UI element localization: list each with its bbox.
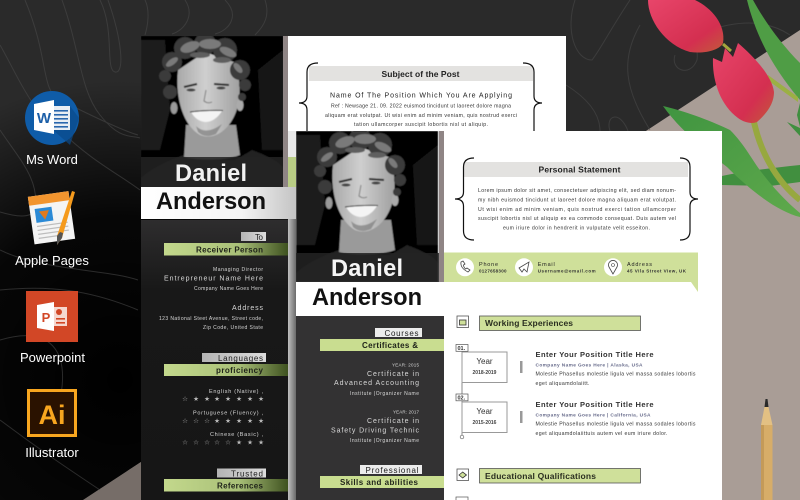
certificate 1: Institute |Organizer Name [350,391,419,397]
receiver details: Address [232,305,264,312]
contact: phone [456,258,507,276]
receiver details: Zip Code, United State [203,325,263,331]
subject body text [325,92,517,128]
icon: Microsoft Word [25,91,79,145]
receiver details: 123 National Steet Avenue, Street code, [159,316,263,322]
name: Anderson: Anderson [156,189,266,215]
contact: address: Address [627,262,652,268]
language ratings: ☆ [204,438,210,446]
white name band [141,187,296,219]
receiver details: Managing Director [213,267,263,273]
certificate 2: Safety Driving Technic [331,428,420,434]
entry 2 details: Enter Your Position Title Here [536,400,654,409]
receiver details: Entrepreneur Name Here [164,276,263,282]
tulips and leaves [648,0,800,217]
entry 2 details [520,400,696,437]
personal statement box: eum iriure dolor in hendrerit in vulputate velit esseiton. [503,226,650,232]
language ratings: ★ [236,395,242,403]
bar: References [164,479,288,492]
language ratings: ☆ [182,395,188,403]
tag: Languages: Languages [218,354,263,363]
entry 1 details: Molestie Phasellus molestie ligula vel massa sodales lobortis [536,372,696,378]
entry 1 details: eget aliquamdolaiitt. [536,381,590,387]
language ratings [182,389,264,446]
tag: To: To [255,233,264,242]
dark sidebar panel [141,220,288,500]
language ratings: ☆ [204,417,210,425]
language ratings: ☆ [225,438,231,446]
language ratings: ★ [258,417,264,425]
personal statement box: my nibh euismod tincidunt ut laoreet dolore magna aliquam erat volutpat. [478,198,676,204]
tag: Languages [202,353,266,363]
name: Anderson: Anderson [312,285,422,311]
language ratings: ★ [214,417,220,425]
bar: Skills and abilities: Skills and abilities [340,478,419,487]
certificate 1: Advanced Accounting [334,380,419,387]
entry 2 date: 02. [458,396,466,402]
language ratings: ☆ [182,438,188,446]
certificate 1 [334,362,419,397]
language ratings: ★ [236,438,242,446]
personal statement box: Lorem ipsum dolor sit amet, consectetuer adipiscing elit, sed diam nonum- [478,188,676,194]
contact: email [515,258,596,276]
tag: Courses: Courses [384,329,418,338]
subject brackets [299,62,542,131]
hair lumps are part of the portrait [159,33,251,101]
section: Educational Qualifications: Educational Qualifications [485,471,596,481]
contact: address [604,258,687,276]
contact: address: 45 Vila Street View, UK [627,268,687,274]
entry 1 date: 2018-2019 [473,370,497,376]
icon: PowerPoint: P [42,310,51,325]
subject header bar [309,66,533,81]
entry 2 details: eget aliquamdolaiittuis autem vel eum iriure dolor. [536,431,668,437]
certificate 1: YEAR: 2015 [392,362,419,368]
language ratings: ★ [225,395,231,403]
entry 1 date: Year [476,357,493,366]
contact: email: Email [538,262,555,268]
subject body text: Ref : Newsage 21. 09. 2022 euismod tincidunt ut laoreet dolore magna [331,104,511,110]
certificate 2 [331,410,420,444]
tag: Professional: Professional [366,466,419,475]
bar: Certificates [320,339,444,351]
left resume sheet [141,33,296,500]
tag: Trusted [217,468,266,478]
tag: To [241,232,266,242]
dark sidebar panel [296,316,444,500]
icon: Adobe Illustrator: Ai [38,400,66,430]
timeline [456,344,507,439]
entry 1 date [456,344,507,382]
language ratings: ☆ [182,417,188,425]
contact: phone: 0127658300 [479,268,507,274]
certificate 2: Institute |Organizer Name [350,438,419,444]
bar: Receiver Person [164,243,288,256]
language ratings: ★ [193,395,199,403]
photo divider stripe [439,131,444,282]
entry 2 date: Year [476,407,493,416]
label: Powerpoint: Powerpoint [20,350,85,365]
portrait photo [141,36,283,160]
contact: email: Username@email.com [538,268,596,274]
section: Working Experiences: Working Experiences [485,318,573,328]
entry 1 date: 01. [458,346,466,352]
certificate 2: Certificate in [367,418,419,425]
back page: cover letter [283,36,566,500]
portrait photo [296,128,438,282]
language ratings: ★ [247,438,253,446]
language ratings: ★ [204,395,210,403]
language ratings: ★ [214,395,220,403]
icon: Microsoft Word: W [37,110,52,127]
bar: Skills and abilities [320,476,444,488]
section: Working Experiences [457,316,640,330]
name band: Daniel [296,253,439,282]
bar: References: References [217,482,264,490]
entry 2 date [456,394,507,432]
bar: proficiency: proficiency [216,366,264,375]
language ratings: Chinese (Basic) , [210,432,263,438]
subject body text: tation ullamcorper suscipit lobortis nisl ut aliquip. [354,122,488,128]
language ratings: ★ [236,417,242,425]
language ratings: ★ [247,395,253,403]
name band: Daniel [141,157,283,187]
entry 1 details [520,350,696,387]
language ratings: ☆ [193,438,199,446]
language ratings: ☆ [193,417,199,425]
receiver details: Company Name Goes Here [194,286,263,292]
certificate 1: Certificate in [367,371,419,378]
name: Daniel: Daniel [331,256,403,282]
personal statement box: Personal Statement [538,164,621,174]
icon: Adobe Illustrator [28,390,76,436]
entry 2 details: Molestie Phasellus molestie ligula vel massa sodales lobortis [536,422,696,428]
personal statement box [455,158,698,240]
label: Apple Pages: Apple Pages [15,253,89,268]
pencil [761,399,772,500]
section: Educational Qualifications [457,468,640,483]
entry 1 details: Enter Your Position Title Here [536,350,654,359]
personal statement box: suscipit lobortis nisl ut aliquip ex ea commodo consequat. Duis autem vel [478,216,676,222]
contact: phone: Phone [479,262,498,268]
entry marker [456,497,468,500]
entry 1 details: Company Name Goes Here | Alaska, USA [536,362,643,368]
language ratings: ★ [258,395,264,403]
contact bar [444,252,698,292]
icon: PowerPoint [26,291,78,342]
language ratings: English (Native) , [209,389,263,395]
icon: Apple Pages [28,191,75,245]
subject body text: Name Of The Position Which You Are Applying [330,92,512,100]
language ratings: ☆ [214,438,220,446]
language ratings: ★ [258,438,264,446]
bar: proficiency [164,364,288,376]
language ratings: ★ [225,417,231,425]
entry 2 details: Company Name Goes Here | California, USA [536,412,651,418]
language ratings: ★ [247,417,253,425]
label: Illustrator: Illustrator [25,445,79,460]
personal statement box: Ut wisi enim ad minim veniam, quis nostrud exerci tation ullamcorper [478,207,676,213]
tag: Trusted: Trusted [231,470,263,478]
subject body text: aliquam erat volutpat. Ut wisi enim ad minim veniam, quis nostrud exerci [325,113,517,119]
subject heading: Subject of the Post [382,69,460,79]
bar: Certificates: Certificates & [362,341,418,350]
name: Daniel: Daniel [175,161,247,187]
language ratings: Portuguese (Fluency) , [193,410,263,416]
receiver details [159,267,264,331]
certificate 2: YEAR: 2017 [393,410,419,414]
front resume sheet [296,128,722,500]
bar: Receiver Person: Receiver Person [196,246,263,254]
label: Ms Word: Ms Word [26,152,78,167]
entry 2 date: 2015-2016 [473,420,497,426]
tag: Courses [375,328,422,338]
